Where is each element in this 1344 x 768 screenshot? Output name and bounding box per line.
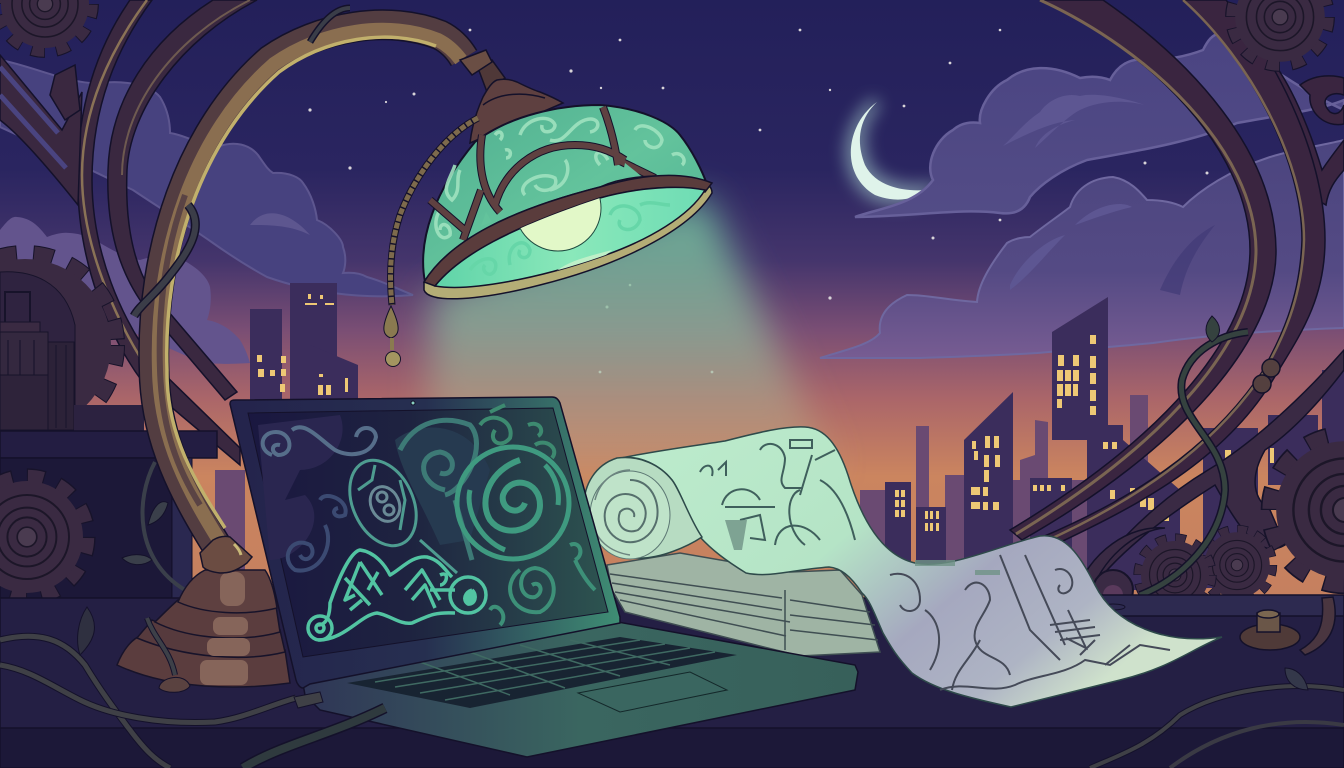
mountain scroll [308, 550, 486, 640]
shade rim [424, 176, 712, 299]
trackpad [578, 672, 727, 712]
lamp arc pole [154, 25, 464, 548]
laptop lid [230, 397, 620, 688]
pull chain [384, 118, 478, 366]
left lattice with slots [0, 55, 82, 205]
scroll roll [584, 457, 702, 559]
arc: inner right [1010, 0, 1276, 540]
lit windows [257, 294, 1290, 531]
top right small spirals [480, 405, 554, 458]
arc beads [1262, 359, 1280, 377]
dark backing shapes [258, 415, 490, 560]
shade swirl pattern [436, 118, 684, 238]
muted scrolls: left [263, 427, 376, 455]
arc: lower right branch [1074, 350, 1344, 597]
laptop plug [294, 692, 323, 708]
ornamental iron arcs: left [0, 0, 257, 465]
dark towers [250, 283, 1344, 590]
scroll of glowing paper [584, 427, 1222, 707]
leaf: lower right [1285, 668, 1308, 690]
curved strap over small gears [1074, 528, 1165, 597]
large spiral disc [457, 447, 569, 559]
clouds: upper right [855, 33, 1344, 217]
scroll sheet [621, 427, 1222, 707]
pole twist vine [134, 205, 195, 316]
laptop screen [248, 408, 608, 657]
small brass fitting on desk [1240, 597, 1335, 655]
laptop [230, 397, 858, 757]
ornamental iron arcs: right [1010, 0, 1344, 597]
shade frame ribs [430, 107, 655, 240]
left shelf with boxes and gear [0, 292, 217, 598]
screen artwork [258, 405, 595, 640]
desk lamp [117, 8, 712, 692]
cables on desk [0, 636, 1344, 768]
city skyline [215, 283, 1344, 596]
lamp bulb [520, 198, 612, 270]
ornate ellipse [337, 450, 457, 573]
stack of papers [607, 553, 880, 656]
shade opening [435, 187, 705, 287]
clouds: lower right [820, 140, 1344, 358]
lamp base [117, 536, 290, 687]
lower right spirals [490, 544, 595, 625]
arc: outer right [1040, 0, 1325, 548]
base cord and plug [147, 618, 190, 692]
gear: large behind left shelf [0, 255, 115, 435]
clouds: upper left [0, 60, 413, 296]
clouds: lower left [0, 217, 250, 364]
rim frame band [424, 175, 712, 286]
desk surface [0, 595, 1344, 768]
light cone from lamp [425, 195, 835, 470]
arc beads lower [1253, 375, 1271, 393]
vine leaf: right [1206, 316, 1220, 342]
keyboard [347, 637, 737, 708]
top right curl frame [1267, 55, 1344, 205]
gears: right side [1093, 436, 1344, 612]
lamp neck [460, 50, 563, 143]
gears: top corners [0, 0, 1328, 65]
distant mauve towers [215, 395, 1148, 596]
inner swirls [470, 203, 670, 274]
scroll symbols [700, 440, 855, 545]
lamp shade dome [423, 105, 708, 295]
desk leaf [78, 607, 94, 655]
centre swirl [400, 420, 477, 560]
stars [217, 29, 1209, 379]
vine: right [1140, 332, 1248, 595]
laptop base [303, 622, 858, 757]
webcam [411, 401, 415, 405]
crescent moon [851, 102, 926, 200]
